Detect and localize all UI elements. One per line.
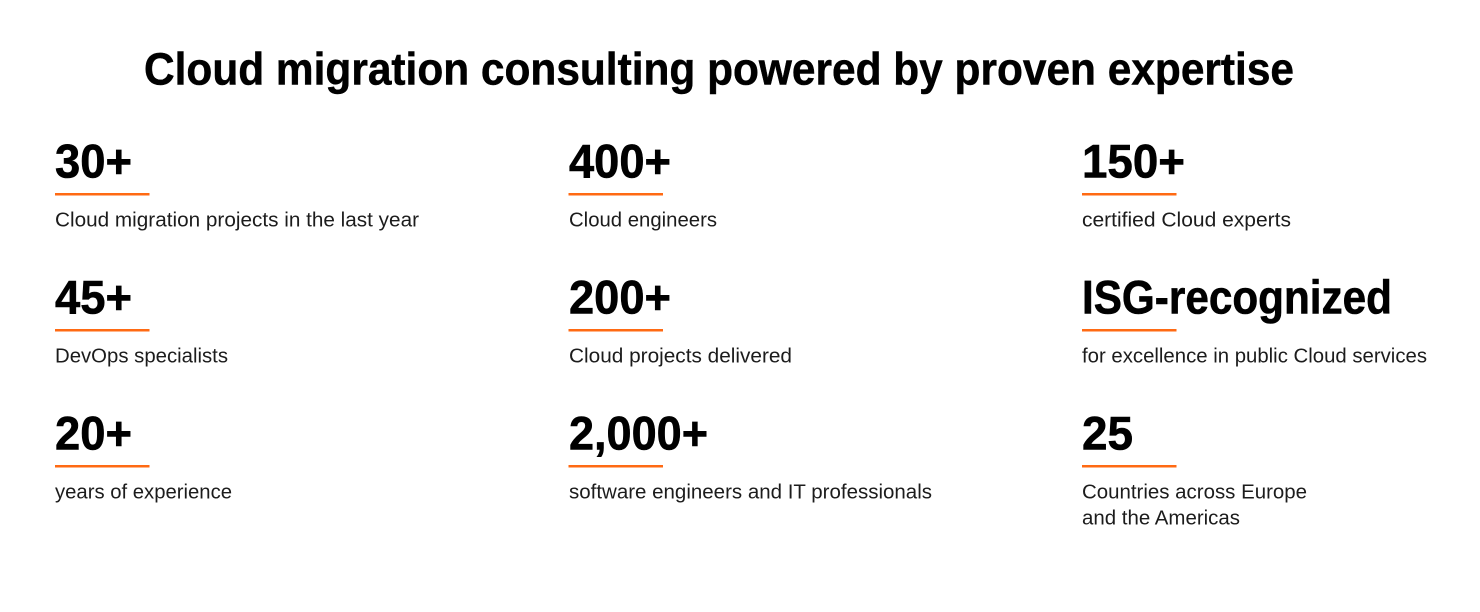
stat: 20+ years of experience: years of experience [55,480,232,504]
stat: 200+ cloud projects delivered: 200+ [569,270,671,324]
stat: 25 countries: Countries across Europe [1082,480,1307,504]
stat: 45+ DevOps specialists [55,270,228,368]
stat: 400+ cloud engineers: Cloud engineers [569,208,717,232]
stat: 30+ cloud migration projects [55,134,419,232]
stat: 45+ DevOps specialists: 45+ [55,270,132,324]
stat: 400+ cloud engineers [568,134,717,232]
stat: 45+ DevOps specialists: DevOps specialists [55,344,228,368]
stat: 25 countries: 25 [1082,406,1133,460]
stat: 25 countries: and the Americas [1082,506,1240,530]
stat: ISG-recognized [1082,270,1427,368]
stat: 20+ years of experience: 20+ [55,406,132,460]
stat: 150+ certified cloud experts: certified Cloud experts [1082,208,1291,232]
stat: 400+ cloud engineers: 400+ [569,134,671,188]
stat: 25 countries [1082,406,1307,530]
stat: 30+ cloud migration projects: Cloud migration projects in the last year [55,208,419,232]
stat: 150+ certified cloud experts: 150+ [1082,134,1185,188]
stat: ISG-recognized: ISG-recognized [1082,270,1392,324]
stat: 2,000+ software engineers: 2,000+ [569,406,708,460]
stat: 30+ cloud migration projects: 30+ [55,134,132,188]
stat: 200+ cloud projects delivered [568,270,792,368]
stat: 2,000+ software engineers: software engineers and IT professionals [569,480,932,504]
stat: 2,000+ software engineers [568,406,932,504]
title: Cloud migration consulting powered by proven expertise [144,44,1294,94]
stat: 150+ certified cloud experts [1082,134,1291,232]
stat: 20+ years of experience [55,406,232,504]
stat: 200+ cloud projects delivered: Cloud projects delivered [569,344,792,368]
stat: ISG-recognized: for excellence in public Cloud services [1082,344,1427,368]
